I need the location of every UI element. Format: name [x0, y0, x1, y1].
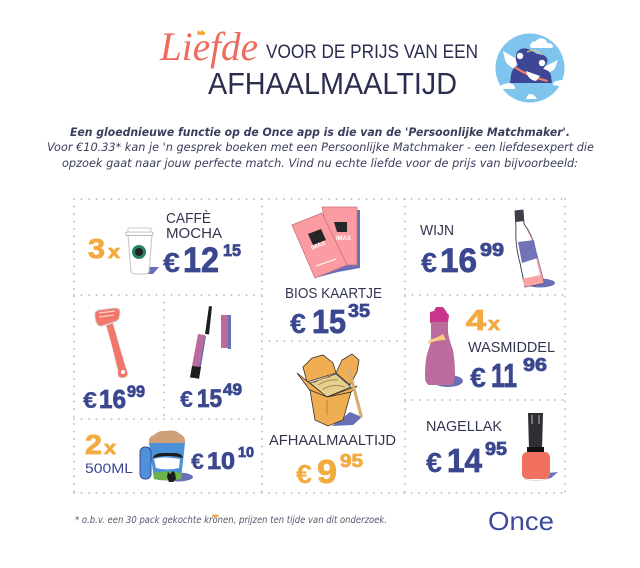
panel: wijn: 99	[480, 240, 504, 260]
panel: bios kaartje: €	[290, 308, 306, 339]
panel: caffè mocha: €	[163, 247, 180, 278]
panel: wasmiddel: WASMIDDEL	[468, 339, 555, 356]
intro text: Een gloednieuwe functie op de Once app is die van de 'Persoonlijke Matchmaker'.	[70, 125, 570, 139]
panel: bios kaartje	[285, 207, 382, 340]
icon: cinema tickets: IMAX	[311, 241, 327, 252]
panel: nagellak: 95	[485, 439, 507, 459]
panel: mascara: €	[180, 386, 193, 412]
panel: wijn: WIJN	[420, 222, 454, 239]
panel: wijn	[420, 210, 555, 288]
footnote: * o.b.v. een 30 pack gekochte kronen, prijzen ten tijde van dit onderzoek.	[75, 515, 387, 526]
title: VOOR DE PRIJS VAN EEN	[266, 42, 478, 63]
logo: Once: Once	[488, 506, 554, 536]
panel: bios kaartje: 35	[348, 301, 370, 321]
panel: scheermes: €	[83, 387, 97, 413]
icon: detergent bottle	[425, 307, 463, 387]
panel: mascara	[180, 306, 242, 413]
panel: ijs: x	[104, 438, 116, 458]
panel: bios kaartje: 15	[312, 303, 346, 340]
intro text	[47, 125, 594, 170]
panel: nagellak: NAGELLAK	[426, 418, 502, 435]
panel: wijn: 16	[440, 242, 477, 280]
panel: scheermes	[83, 308, 145, 414]
icon: frog with wings in sky circle	[496, 34, 564, 102]
intro text: opzoek gaat naar jouw perfecte match. Vind nu echte liefde voor de prijs van bijvoorbeeld:	[62, 156, 578, 170]
intro text: Voor €10.33* kan je 'n gesprek boeken met een Persoonlijke Matchmaker - een liefdesexpert die	[47, 140, 594, 154]
icon: mascara	[190, 306, 231, 379]
panel: wasmiddel: 11	[491, 357, 517, 394]
panel: nagellak: €	[426, 447, 442, 478]
panel: wasmiddel: x	[488, 314, 500, 334]
icon: cinema tickets: IMAX	[336, 236, 351, 242]
icon: cinema tickets	[292, 207, 360, 278]
icon: coffee cup	[126, 228, 159, 274]
panel: caffè mocha: x	[108, 242, 120, 262]
panel: wasmiddel: 96	[523, 355, 547, 375]
panel: ijs	[85, 429, 254, 482]
panel: caffè mocha: MOCHA	[166, 225, 222, 242]
panel: wijn: €	[421, 247, 437, 278]
panel: ijs: 10	[238, 444, 254, 461]
panel: caffè mocha: 3	[88, 233, 105, 264]
title: AFHAALMAALTIJD	[208, 66, 457, 101]
panel: bios kaartje: BIOS KAARTJE	[285, 285, 382, 302]
panel: ijs: 10	[207, 448, 235, 475]
title	[159, 24, 478, 101]
panel: caffè mocha: 15	[223, 241, 241, 260]
panel: caffè mocha: 12	[183, 241, 219, 280]
icon: ice cream tub	[140, 430, 193, 482]
title: Liefde	[159, 24, 258, 69]
panel: wasmiddel: 4	[466, 305, 486, 337]
panel: mascara: 49	[223, 380, 242, 399]
icon: nail polish	[522, 413, 558, 480]
panel: caffè mocha	[88, 210, 241, 280]
panel: afhaalmaaltijd: 9	[317, 453, 337, 490]
panel: afhaalmaaltijd: €	[296, 459, 312, 489]
panel: ijs: 2	[85, 429, 102, 460]
panel: ijs: 500ML	[85, 460, 133, 476]
panel: scheermes: 16	[99, 384, 126, 414]
panel: caffè mocha: CAFFÈ	[166, 210, 211, 227]
panel: ijs: €	[191, 449, 204, 474]
icon: razor	[95, 308, 128, 378]
panel: nagellak: 14	[447, 442, 483, 479]
panel: afhaalmaaltijd: AFHAALMAALTIJD	[269, 432, 396, 449]
panel: scheermes: 99	[127, 382, 145, 401]
panel: nagellak	[426, 413, 558, 480]
panel: wasmiddel: €	[470, 362, 486, 393]
panel: mascara: 15	[197, 385, 222, 413]
icon: noodle box	[297, 354, 363, 426]
panel: afhaalmaaltijd	[269, 354, 396, 490]
icon: wine bottle	[515, 210, 555, 288]
panel: afhaalmaaltijd: 95	[340, 451, 363, 471]
panel: wasmiddel	[425, 305, 555, 394]
